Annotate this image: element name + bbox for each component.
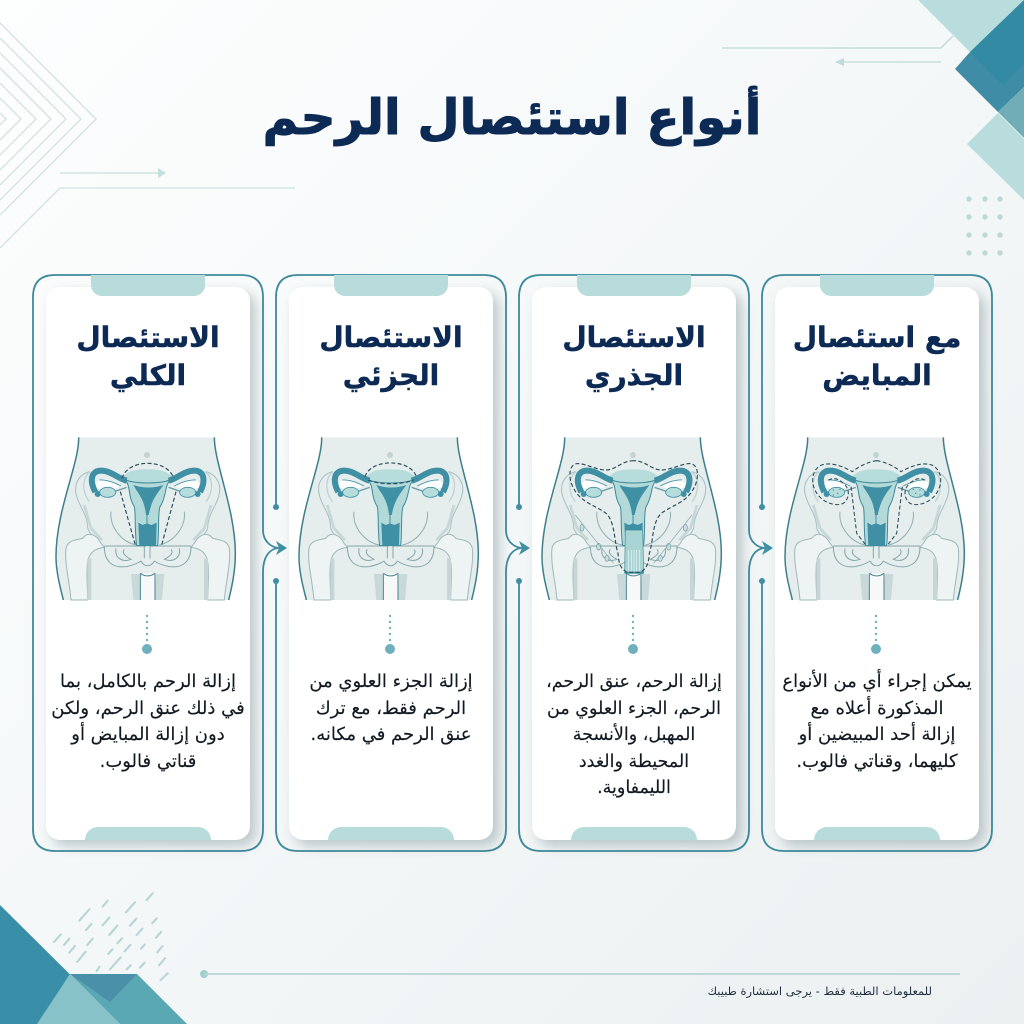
card frame with arrow [273,274,530,852]
dotted connector [871,614,881,654]
panel: total hysterectomy [32,274,287,852]
white card [46,287,250,840]
decor: bottom left shapes [0,905,187,1024]
description: المذكورة أعلاه مع [811,698,943,718]
heading: الكلي [110,359,186,392]
heading: مع استئصال [793,321,961,354]
description: كليهما، وقناتي فالوب. [796,750,958,772]
dotted connector [142,614,152,654]
card frame [759,274,993,852]
top tab [334,275,448,296]
illustration: pelvis with dashed uterus and cervix removal [55,437,236,600]
decor: top left chevrons [0,23,295,248]
panel: with oophorectomy [759,274,993,852]
footer line [200,970,960,978]
heading: الاستئصال [562,321,706,354]
dotted connector [385,614,395,654]
heading: الاستئصال [319,321,463,354]
heading: المبايض [822,359,932,392]
description: يمكن إجراء أي من الأنواع [782,671,972,692]
description: إزالة الجزء العلوي من [309,671,473,692]
bottom tab [814,827,940,840]
heading [562,321,706,392]
description: عنق الرحم في مكانه. [311,724,471,745]
heading [76,321,220,392]
description: الليمفاوية. [597,778,671,798]
white card [532,287,736,840]
decor: dot grid [966,196,1003,256]
heading: الجزئي [343,359,439,392]
decor: top right lines [722,36,953,66]
description: دون إزالة المبايض أو [71,724,225,745]
description: الرحم، الجزء العلوي من [547,698,721,718]
bottom tab [85,827,211,840]
illustration: pelvis with dashed uterine fundus [298,437,480,600]
description: إزالة الرحم، عنق الرحم، [546,672,722,692]
footer note: للمعلومات الطبية فقط - يرجى استشارة طبيبك [708,984,932,998]
top tab [820,275,934,296]
description [546,672,722,798]
white card [289,287,493,840]
description [309,671,473,745]
card frame with arrow [516,274,773,852]
dotted connector [628,614,638,654]
heading [793,321,961,392]
illustration: pelvis with wide dashed margin and lymph nodes [541,437,722,600]
panel: radical hysterectomy [516,274,773,852]
heading: الجذري [585,359,683,392]
description: إزالة الرحم بالكامل، بما [60,671,236,692]
white card [775,287,979,840]
description: الرحم فقط، مع ترك [316,698,466,718]
title: أنواع استئصال الرحم [263,90,761,146]
description: إزالة أحد المبيضين أو [799,724,955,745]
description [51,671,245,772]
top tab [91,275,205,296]
illustration: pelvis with dashed ovaries and tubes [784,437,966,600]
card frame with arrow [32,274,287,852]
top tab [577,275,691,296]
panel: subtotal hysterectomy [273,274,530,852]
decor: top right diamonds [918,0,1024,200]
bottom tab [328,827,454,840]
heading [319,321,463,392]
decor: bottom left hatch [54,893,168,980]
description: قناتي فالوب. [100,750,196,772]
heading: الاستئصال [76,321,220,354]
bottom tab [571,827,697,840]
description: المحيطة والغدد [579,752,689,772]
description [782,668,972,772]
description: في ذلك عنق الرحم، ولكن [51,698,245,718]
description: المهبل، والأنسجة [573,725,695,745]
